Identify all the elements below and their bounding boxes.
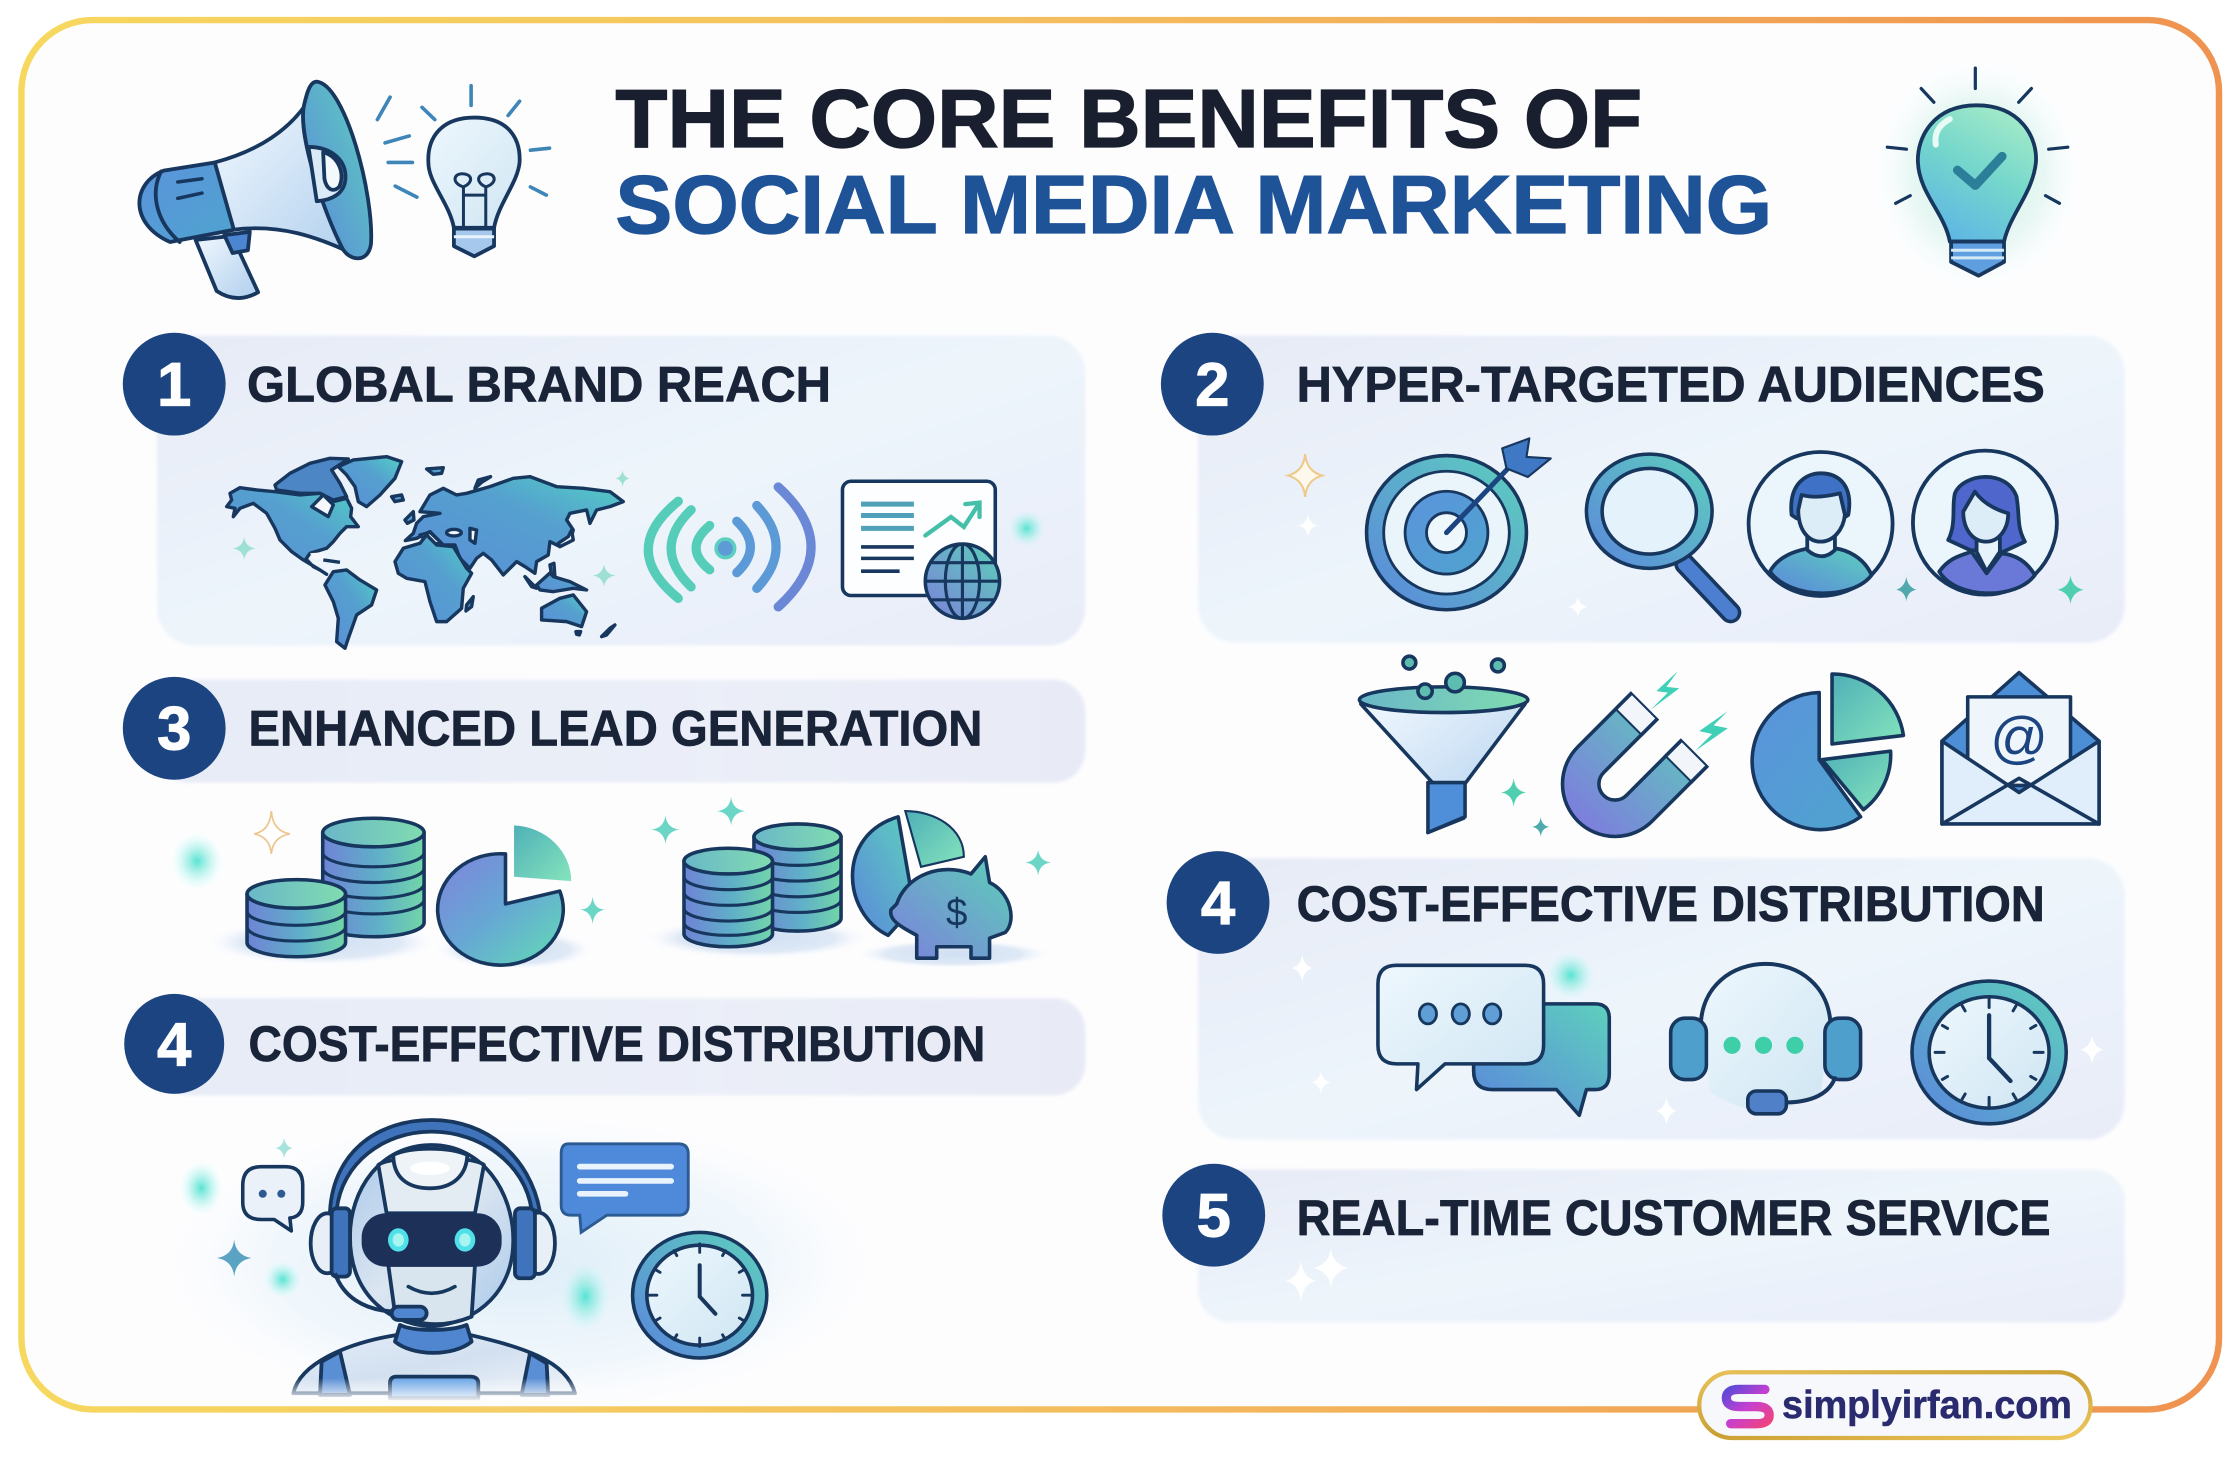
header bar xyxy=(157,680,1085,783)
icon: envelope: @ xyxy=(1990,706,2048,770)
bulb drawing xyxy=(1887,68,2068,276)
coin stack back xyxy=(754,824,841,931)
coin stack front xyxy=(684,848,773,947)
number badge 5: 5 xyxy=(1197,1182,1231,1251)
sparkle glow xyxy=(1008,510,1045,547)
sparkles xyxy=(254,797,1051,924)
sparkle glow xyxy=(1546,951,1595,1000)
icon: headset xyxy=(1671,964,1861,1114)
coin stack back xyxy=(323,818,424,937)
panel: 1 global brand reach xyxy=(123,333,1085,648)
number badge 5 xyxy=(1162,1164,1265,1267)
panel: 5 real-time customer service xyxy=(1162,1164,2125,1322)
icon: magnifier xyxy=(1586,454,1731,613)
clock xyxy=(633,1232,767,1358)
icon: female avatar xyxy=(1913,451,2057,595)
panel background xyxy=(1198,858,2125,1140)
icon: megaphone xyxy=(139,82,371,298)
icon: envelope xyxy=(1942,673,2099,824)
pie chart xyxy=(438,825,571,965)
logo: S mark xyxy=(1726,1389,1769,1424)
map sparkles xyxy=(233,470,630,587)
panel: 4 cost-effective distribution (right) xyxy=(1167,851,2125,1140)
header bar xyxy=(157,998,1085,1095)
panel: 2 hyper-targeted audiences xyxy=(1161,333,2125,643)
number badge 4: 4 xyxy=(1201,869,1235,938)
panel background xyxy=(1198,1170,2125,1322)
heading: ENHANCED LEAD GENERATION xyxy=(248,700,982,756)
title line two: SOCIAL MEDIA MARKETING xyxy=(615,158,1772,251)
pie chart xyxy=(852,811,964,935)
heading: REAL-TIME CUSTOMER SERVICE xyxy=(1297,1190,2051,1246)
icon: pie chart xyxy=(1752,674,1903,830)
heading: COST-EFFECTIVE DISTRIBUTION xyxy=(248,1016,985,1072)
gold sparkle xyxy=(1288,454,1322,497)
sparkles xyxy=(1501,778,1549,837)
bottom fade xyxy=(286,1378,585,1402)
number badge 4: 4 xyxy=(157,1010,191,1079)
number badge 3: 3 xyxy=(157,695,191,764)
number badge 3 xyxy=(123,677,226,780)
header xyxy=(139,60,2080,298)
piggy bank xyxy=(891,857,1011,958)
panel background xyxy=(1198,336,2125,643)
soft background xyxy=(164,1114,878,1414)
title xyxy=(615,72,1772,251)
icon: signal waves xyxy=(648,487,811,607)
badge pill xyxy=(1699,1372,2090,1438)
brand name: simplyirfan.com xyxy=(1782,1384,2072,1427)
icon: light bulb with rays xyxy=(377,86,550,256)
icon: target with arrow xyxy=(1367,438,1551,610)
icon: magnet xyxy=(1581,671,1728,818)
number badge 2 xyxy=(1161,333,1264,436)
robot figure xyxy=(293,1120,575,1398)
icon: chat bubbles xyxy=(1378,965,1609,1115)
icon: report with globe xyxy=(842,481,1000,618)
number badge 4 xyxy=(1167,851,1269,954)
sparkles xyxy=(1298,514,2083,617)
panel background xyxy=(157,336,1085,645)
icon: check-mark light bulb xyxy=(1875,60,2080,288)
bulb halo xyxy=(1875,60,2080,288)
number badge 1 xyxy=(123,333,226,436)
coin stack front xyxy=(247,880,346,957)
icon group: coins, pie and piggy bank xyxy=(645,811,1051,968)
illustration: robot agent xyxy=(164,1114,878,1414)
piggy bank: $ xyxy=(946,891,967,934)
number badge 4 xyxy=(124,994,224,1094)
white sparkles xyxy=(1291,954,2103,1125)
icon: world map xyxy=(227,457,623,648)
panel: 4 cost-effective distribution (left) xyxy=(124,994,1085,1414)
icon: male avatar xyxy=(1749,452,1893,596)
small speech bubble xyxy=(243,1167,303,1231)
panel: 3 enhanced lead generation xyxy=(123,677,1085,970)
white sparkles xyxy=(1285,1248,1348,1302)
watermark badge xyxy=(1699,1372,2090,1438)
number badge 1: 1 xyxy=(157,351,191,420)
heading: COST-EFFECTIVE DISTRIBUTION xyxy=(1297,876,2045,932)
icon group: coins and pie xyxy=(171,818,593,970)
icon: clock xyxy=(1912,981,2066,1124)
heading: HYPER-TARGETED AUDIENCES xyxy=(1297,356,2045,412)
number badge 2: 2 xyxy=(1195,351,1229,420)
sparkles and glows xyxy=(180,1138,610,1331)
icon: funnel xyxy=(1359,656,1528,833)
heading: GLOBAL BRAND REACH xyxy=(247,356,831,412)
title line one: THE CORE BENEFITS OF xyxy=(615,72,1642,165)
icon row: funnel, magnet, pie chart, envelope xyxy=(1359,656,2099,837)
blue speech bubble xyxy=(561,1144,688,1232)
